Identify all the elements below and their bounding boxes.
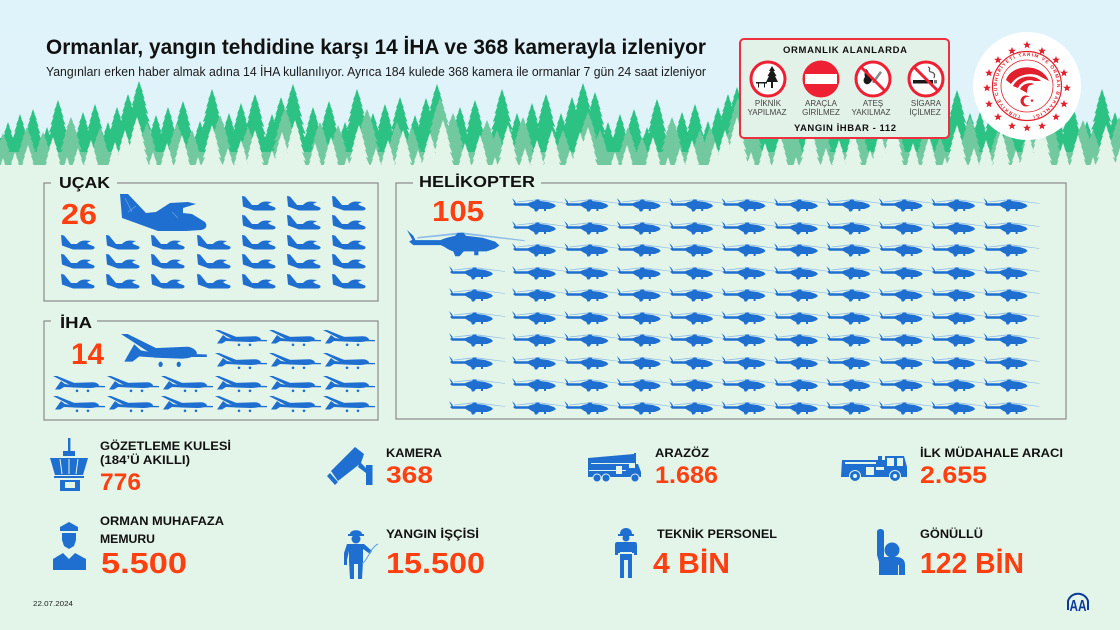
stat: volunteers: GÖNÜLLÜ (920, 526, 983, 541)
icon: technician (615, 528, 637, 578)
icon: fire engine (588, 453, 641, 482)
icon: no picnic (751, 62, 785, 96)
icon: large drone (121, 334, 207, 367)
label: smoking: SİGARA (911, 99, 942, 108)
number: 14: 14 (71, 338, 104, 371)
label: smoking: İÇİLMEZ (909, 108, 941, 117)
panel: forest area rules (740, 39, 949, 138)
stat: technical staff: TEKNİK PERSONEL (657, 526, 777, 541)
stat: watch towers: GÖZETLEME KULESİ (100, 438, 231, 453)
stat: first response vehicles: İLK MÜDAHALE ARACI (920, 445, 1063, 460)
date: 22.07.2024 (33, 599, 73, 608)
label: fire: YAKILMAZ (852, 108, 891, 117)
icon: volunteer (877, 529, 905, 575)
icon: large aircraft (120, 194, 206, 231)
label: vehicles: GİRİLMEZ (802, 108, 840, 117)
stat: fire workers: 15.500 (386, 548, 485, 580)
stat: fire engines: 1.686 (655, 462, 718, 489)
stat: forest guards: ORMAN MUHAFAZA (100, 514, 224, 528)
logo: AA (1068, 594, 1088, 615)
icon: camera (327, 447, 372, 485)
stat: volunteers: 122 BİN (920, 548, 1024, 580)
icon: no smoking (909, 62, 943, 96)
number: 105: 105 (432, 196, 484, 228)
stat: watch towers: 776 (100, 469, 141, 496)
aircraft pictogram grid (61, 196, 366, 288)
stat: first response vehicles (841, 445, 1063, 489)
drone pictogram grid (53, 330, 375, 412)
stat: fire engines (588, 445, 718, 489)
emergency line: YANGIN İHBAR - 112 (794, 123, 896, 134)
icon: large helicopter (407, 230, 525, 256)
icon: no entry (802, 60, 840, 98)
stat: forest guards (53, 514, 224, 580)
panel: aircraft (44, 175, 378, 301)
icon: no fire (856, 62, 890, 96)
stat: technical staff (615, 526, 777, 580)
stat: fire workers: YANGIN İŞÇİSİ (386, 526, 479, 541)
stat: fire engines: ARAZÖZ (655, 445, 709, 460)
heading: aircraft: UÇAK (59, 175, 110, 192)
icon: fire worker (344, 530, 378, 579)
stat: technical staff: 4 BİN (653, 548, 730, 580)
stat: forest guards: 5.500 (101, 548, 187, 580)
title: Ormanlar, yangın tehdidine karşı 14 İHA ve 368 kamerayla izleniyor (46, 36, 706, 59)
stat: cameras: KAMERA (386, 446, 442, 460)
label: vehicles: ARAÇLA (805, 99, 838, 108)
panel: drones (44, 314, 378, 420)
label: picnic: PİKNİK (755, 99, 782, 108)
heading: drones: İHA (60, 314, 93, 332)
forest treeline (0, 81, 1120, 165)
stat: forest guards: MEMURU (100, 532, 155, 546)
stat: watch towers: (184’Ü AKILLI) (100, 452, 190, 467)
stat: cameras: 368 (386, 462, 433, 489)
panel heading: ORMANLIK ALANLARDA (783, 45, 907, 56)
stat: watch towers (50, 438, 231, 496)
stat: cameras (327, 446, 442, 489)
heading: helicopters: HELİKOPTER (419, 173, 535, 191)
ministry seal: TÜRKİYE CUMHURİYETİ TARIM VE ORMAN BAKANLIĞI (994, 52, 1060, 119)
number: 26: 26 (61, 199, 97, 231)
panel: helicopters (396, 173, 1066, 419)
label: picnic: YAPILMAZ (748, 108, 787, 117)
stat: volunteers (877, 526, 1024, 580)
stat: first response vehicles: 2.655 (920, 462, 987, 489)
icon: watch tower (50, 438, 88, 491)
icon: officer (53, 522, 86, 570)
subtitle: Yangınları erken haber almak adına 14 İHA kullanılıyor. Ayrıca 184 kulede 368 kamera ile ormanlar 7 gün 24 saat izleniyor (46, 65, 706, 79)
icon: response truck (841, 456, 907, 482)
stat: fire workers (344, 526, 485, 580)
logo: AA: AA (1070, 598, 1087, 615)
helicopter pictogram grid (449, 198, 1040, 414)
label: fire: ATEŞ (863, 99, 883, 108)
ministry seal (973, 32, 1081, 140)
